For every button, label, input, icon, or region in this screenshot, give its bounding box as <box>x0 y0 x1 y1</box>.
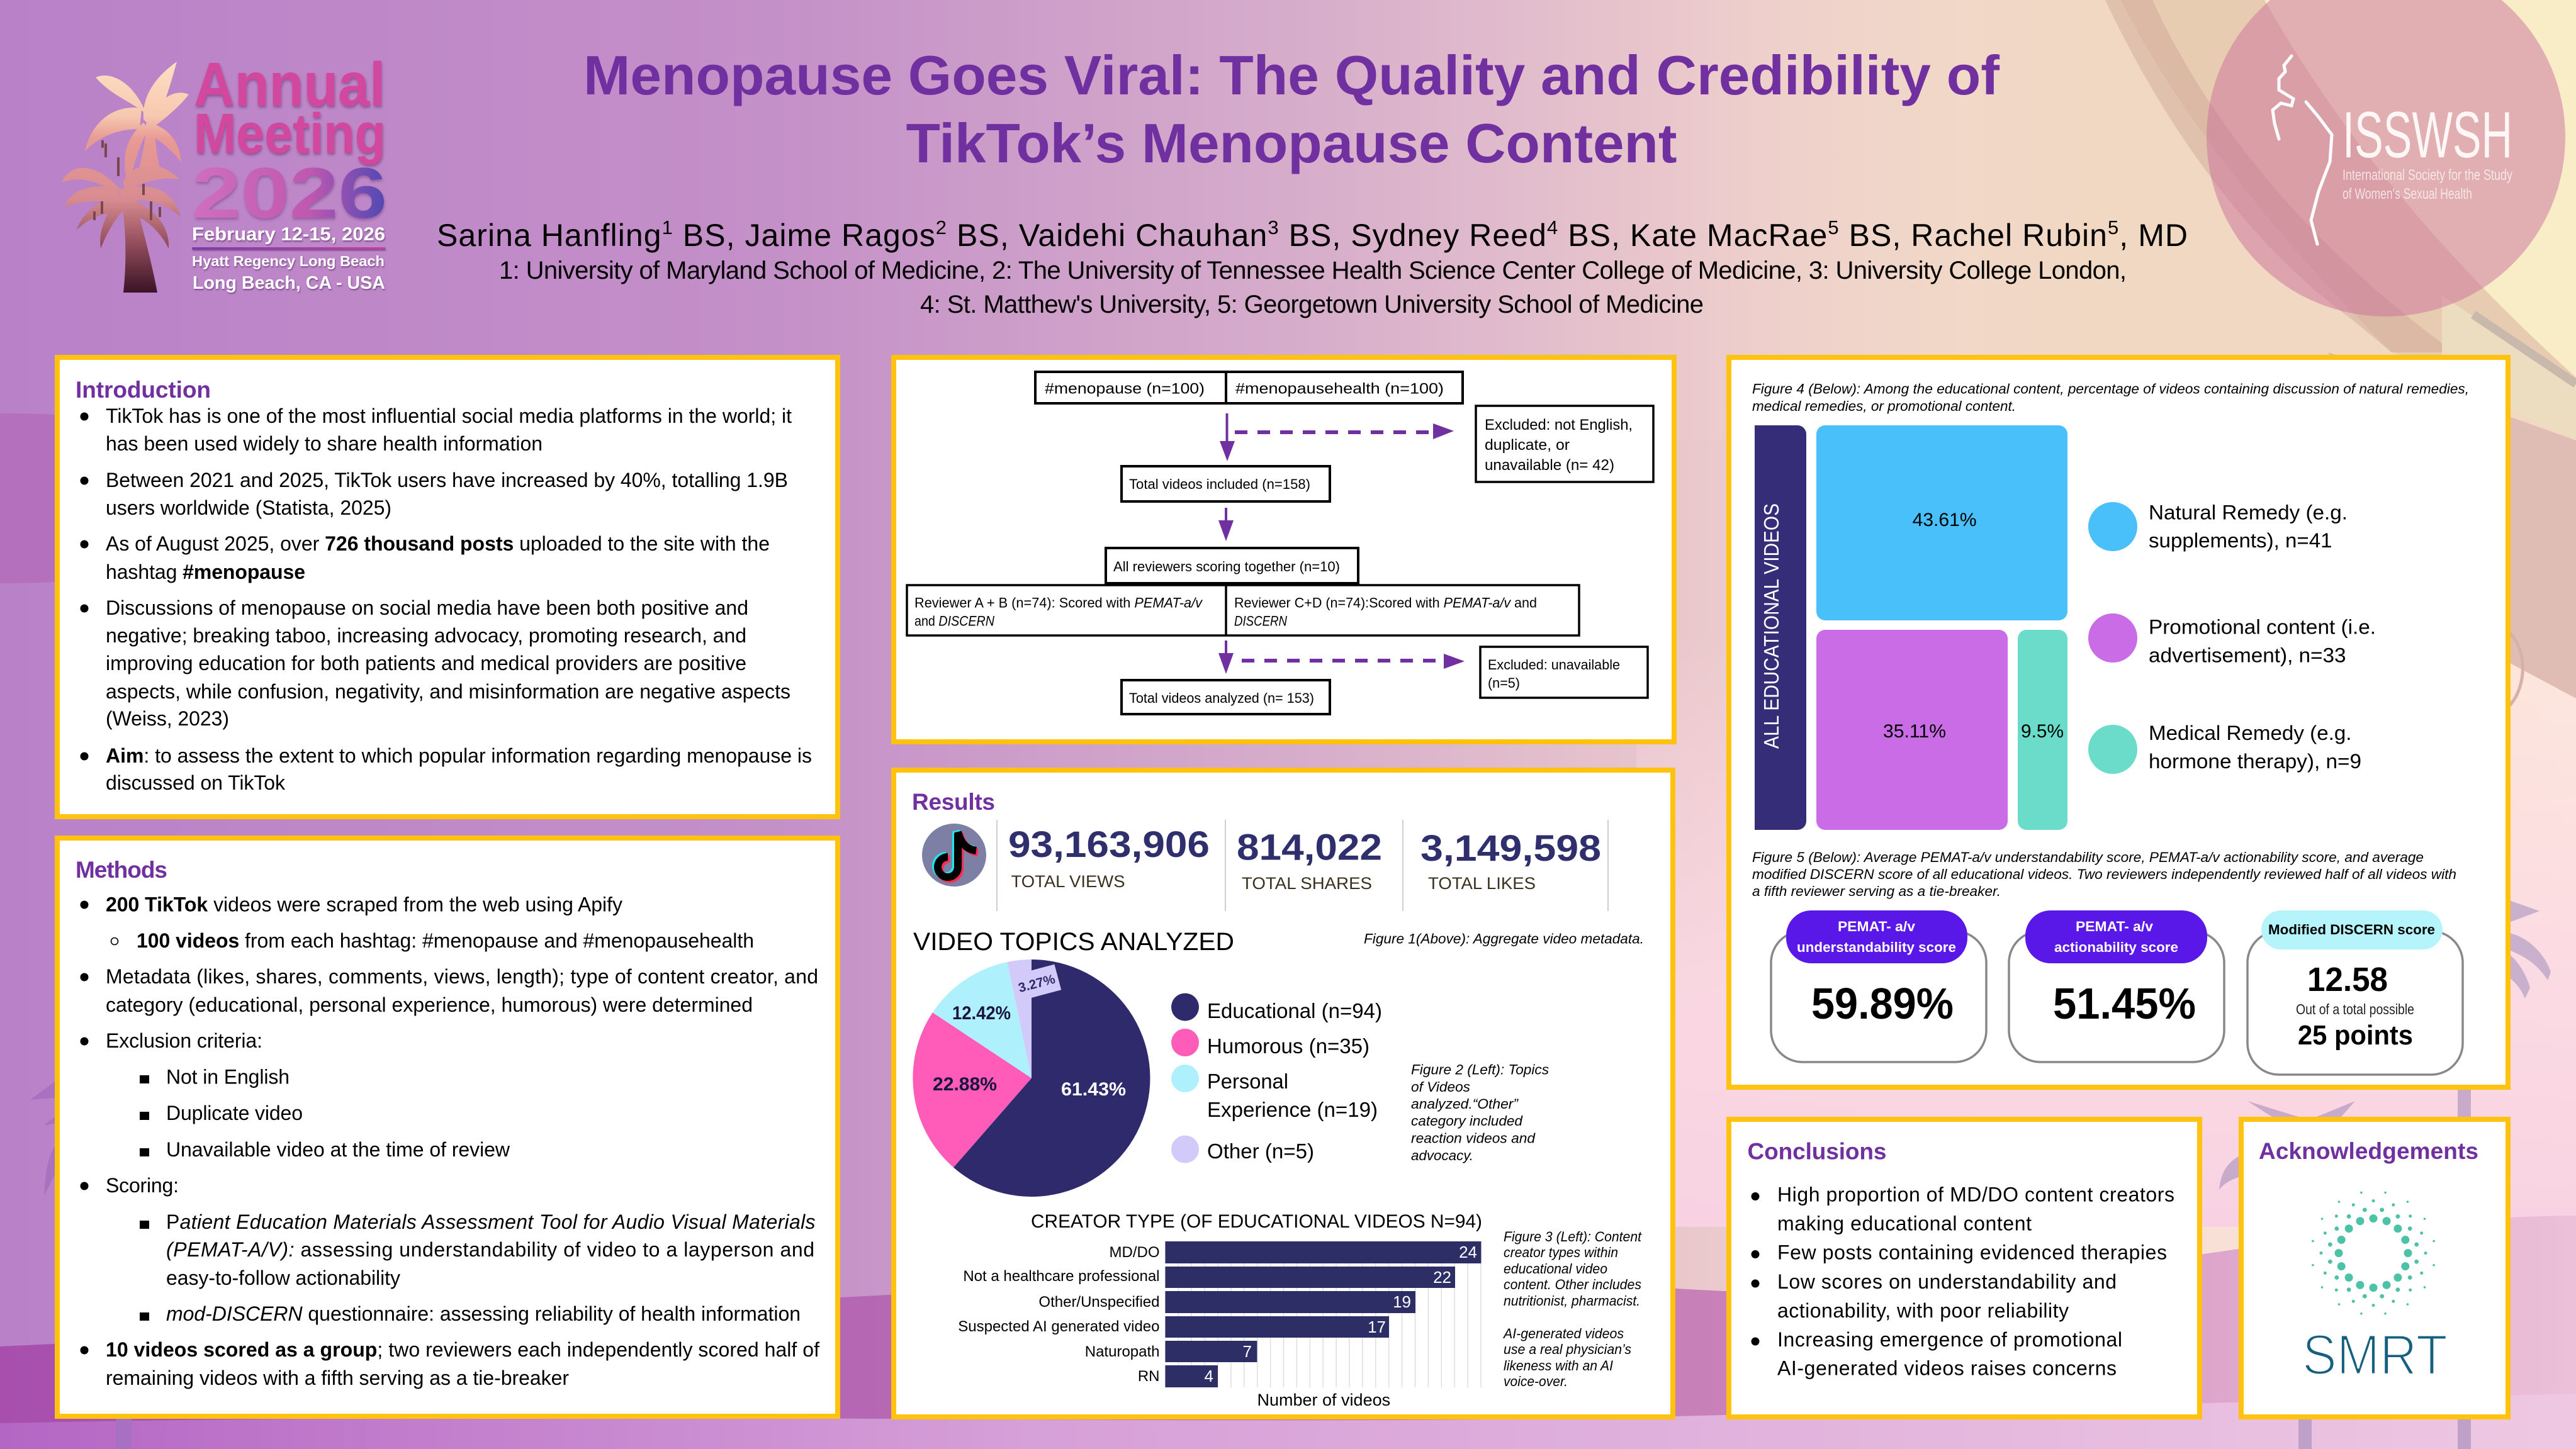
authors: Sarina Hanfling <box>437 218 661 253</box>
authors: 3 <box>1268 216 1279 238</box>
heading: methods: Methods <box>76 857 167 883</box>
authors: 5 <box>2108 216 2118 238</box>
bar chart: creator type: 19 <box>1393 1292 1411 1311</box>
text block: introduction bullets: has been used widely to share health information <box>106 432 543 455</box>
flow box: reviewer pairs <box>907 585 1579 635</box>
caption: figure 3: content. Other includes <box>1504 1277 1641 1292</box>
authors: , MD <box>2119 218 2188 253</box>
caption: figure 3: use a real physician’s <box>1504 1341 1631 1357</box>
text block: methods bullets: 10 videos scored as a group; two reviewers each independently scored half of <box>106 1338 819 1361</box>
panel: acknowledgements <box>2241 1119 2508 1417</box>
flow box: hashtags: #menopausehealth (n=100) <box>1235 380 1444 398</box>
text block: methods bullets: 200 TikTok videos were scraped from the web using Apify <box>106 893 622 916</box>
legend: remedies: hormone therapy), n=9 <box>2149 750 2361 773</box>
text block: introduction bullets: users worldwide (Statista, 2025) <box>106 496 391 519</box>
score card: actionability <box>2009 910 2224 1062</box>
caption: figure 2 <box>1411 1062 1549 1163</box>
logo: SMRT <box>2302 1191 2448 1387</box>
bar chart: creator type: Suspected AI generated video <box>958 1318 1159 1335</box>
pie chart: video topics: 12.42% <box>952 1003 1011 1024</box>
authors: BS, Rachel Rubin <box>1840 218 2107 253</box>
caption: figure 4: medical remedies, or promotional content. <box>1752 398 2016 414</box>
stat: total views: 93,163,906 <box>1008 824 1210 865</box>
panel: figures 4 and 5 <box>1729 357 2508 1087</box>
bar chart: creator type: Other/Unspecified <box>1038 1294 1159 1311</box>
treemap: educational videos: 43.61% <box>1913 510 1977 530</box>
text block: introduction bullets: improving education for both patients and medical providers are positive <box>106 652 746 674</box>
caption: figure 5 <box>1752 849 2456 899</box>
score card: understandability: understandability score <box>1797 939 1956 955</box>
flow box: hashtags <box>1035 372 1463 403</box>
bar chart: creator type: 22 <box>1433 1268 1451 1287</box>
icon: tiktok logo <box>922 824 986 887</box>
bar chart: creator type: 7 <box>1243 1342 1252 1361</box>
caption: figure 5: modified DISCERN score of all educational videos. Two reviewers independently reviewed half of all videos with <box>1752 866 2456 882</box>
caption: figure 4: Figure 4 (Below): Among the educational content, percentage of videos containing discussion of natural remedies, <box>1752 381 2469 396</box>
text block: conclusions bullets: Low scores on understandability and <box>1777 1270 2117 1293</box>
flow box: excluded 5: Excluded: unavailable <box>1488 657 1620 673</box>
arrow: dashed to excluded 5 <box>1242 654 1465 669</box>
caption: figure 2: reaction videos and <box>1411 1130 1536 1146</box>
arrow: down to included <box>1220 413 1235 461</box>
text block: conclusions bullets: making educational content <box>1777 1212 2032 1235</box>
stat: total shares: TOTAL SHARES <box>1242 874 1372 893</box>
caption: figure 1: Figure 1(Above): Aggregate video metadata. <box>1364 931 1644 947</box>
authors: BS, Kate MacRae <box>1558 218 1827 253</box>
legend: video topics: Experience (n=19) <box>1207 1098 1378 1121</box>
text block: introduction bullets: discussed on TikTok <box>106 771 286 794</box>
text block: introduction bullets: TikTok has is one of the most influential social media platforms in the world; it <box>106 405 792 427</box>
logo: SMRT: SMRT <box>2302 1324 2448 1387</box>
caption: figure 3: likeness with an AI <box>1504 1358 1613 1373</box>
text block: methods bullets: Exclusion criteria: <box>106 1029 262 1052</box>
caption: figure 3: educational video <box>1504 1261 1607 1277</box>
logo text: dates and venue: Long Beach, CA - USA <box>193 273 385 293</box>
bar chart: creator type: 17 <box>1368 1318 1386 1336</box>
caption: figure 5: Figure 5 (Below): Average PEMAT-a/v understandability score, PEMAT-a/v actionability score, and average <box>1752 849 2424 865</box>
legend: video topics: Humorous (n=35) <box>1207 1034 1370 1058</box>
text block: introduction bullets: Between 2021 and 2025, TikTok users have increased by 40%, totalling 1.9B <box>106 469 788 491</box>
bar chart: creator type: MD/DO <box>1109 1244 1159 1261</box>
authors: 5 <box>1828 216 1839 238</box>
text block: conclusions bullets: High proportion of MD/DO content creators <box>1777 1183 2174 1206</box>
logo: ISSWSH: of Women's Sexual Health <box>2343 186 2472 203</box>
logo text: dates and venue <box>192 224 385 293</box>
score card: modified discern: Out of a total possible <box>2296 1001 2414 1017</box>
stat: total likes: TOTAL LIKES <box>1428 874 1536 893</box>
stat: total likes <box>1420 828 1601 893</box>
text block: methods bullets: category (educational, personal experience, humorous) were determined <box>106 993 753 1016</box>
logo: ISSWSH: International Society for the Study <box>2343 167 2512 184</box>
text block: introduction bullets: Discussions of menopause on social media have been both positive and <box>106 596 748 619</box>
text block: methods bullets: Metadata (likes, shares, comments, views, length); type of content creator, and <box>106 965 818 988</box>
score card: actionability: PEMAT- a/v <box>2076 919 2154 934</box>
bar chart: creator type: Naturopath <box>1085 1343 1159 1360</box>
flow box: excluded 42 <box>1476 406 1653 482</box>
legend: remedies: advertisement), n=33 <box>2149 644 2346 667</box>
legend: video topics: Personal <box>1207 1070 1288 1093</box>
arrow: down to reviewers <box>1218 508 1234 541</box>
legend: remedies <box>2088 501 2376 774</box>
bar chart: creator type: Number of videos <box>1257 1390 1390 1409</box>
treemap: educational videos: 35.11% <box>1883 721 1946 742</box>
pie chart: video topics: 3.27% <box>1017 972 1057 995</box>
text block: methods bullets: easy-to-follow actionability <box>166 1267 400 1289</box>
flow box: total analyzed: Total videos analyzed (n= 153) <box>1129 690 1314 706</box>
stat: total shares <box>1237 827 1382 893</box>
score card: modified discern: 25 points <box>2298 1020 2413 1051</box>
text block: methods bullets: Duplicate video <box>166 1102 303 1124</box>
flow box: excluded 42: Excluded: not English, <box>1485 417 1633 434</box>
stat: total views: TOTAL VIEWS <box>1011 872 1125 891</box>
chart title: CREATOR TYPE (OF EDUCATIONAL VIDEOS N=94) <box>1031 1211 1482 1232</box>
treemap: educational videos <box>1755 425 2067 830</box>
heading: introduction: Introduction <box>76 377 211 403</box>
score card: actionability: 51.45% <box>2053 979 2196 1028</box>
flow box: total included: Total videos included (n=158) <box>1129 476 1310 492</box>
flow box: reviewer pairs: DISCERN <box>1234 613 1287 629</box>
caption: figure 2: advocacy. <box>1411 1148 1473 1163</box>
bar chart: creator type: 4 <box>1205 1367 1213 1385</box>
logo text: 2026: 2026 <box>192 154 387 233</box>
text block: introduction bullets: negative; breaking taboo, increasing advocacy, promoting research, and <box>106 624 746 647</box>
flow box: excluded 5 <box>1480 647 1648 698</box>
text block: methods bullets: Unavailable video at the time of review <box>166 1138 510 1161</box>
logo: annual meeting 2026 <box>62 50 387 293</box>
caption: figure 3: nutritionist, pharmacist. <box>1504 1293 1640 1309</box>
caption: figure 3: Figure 3 (Left): Content <box>1504 1229 1642 1245</box>
treemap: educational videos: ALL EDUCATIONAL VIDEOS <box>1760 503 1783 749</box>
bar chart: creator type <box>958 1211 1482 1409</box>
caption: figure 2: of Videos <box>1411 1079 1470 1095</box>
title: Menopause Goes Viral: The Quality and Credibility of <box>583 44 2000 106</box>
caption: figure 3: creator types within <box>1504 1245 1618 1260</box>
bar chart: creator type: Not a healthcare professional <box>963 1268 1159 1285</box>
text block: methods bullets: Patient Education Materials Assessment Tool for Audio Visual Materials <box>166 1211 816 1233</box>
authors: BS, Vaidehi Chauhan <box>947 218 1267 253</box>
text block: conclusions bullets: Increasing emergence of promotional <box>1777 1328 2122 1351</box>
flow box: total included <box>1122 466 1330 501</box>
caption: figure 2: category included <box>1411 1113 1523 1129</box>
text block: introduction bullets: (Weiss, 2023) <box>106 707 229 730</box>
caption: figure 5: a fifth reviewer serving as a tie-breaker. <box>1752 883 2001 899</box>
heading: acknowledgements: Acknowledgements <box>2259 1138 2478 1164</box>
flow box: excluded 5: (n=5) <box>1488 675 1520 691</box>
affiliations: 1: University of Maryland School of Medicine, 2: The University of Tennessee Health Science Center College of Medicine, 3: University College London, <box>499 257 2127 284</box>
panel: conclusions <box>1729 1119 2200 1417</box>
text block: introduction bullets: Aim: to assess the extent to which popular information regarding menopause is <box>106 744 812 767</box>
text block: methods bullets: Scoring: <box>106 1174 179 1197</box>
icon: palm trees <box>62 62 189 293</box>
logo text: dates and venue: Hyatt Regency Long Beach <box>192 253 385 269</box>
logo text: dates and venue: February 12-15, 2026 <box>192 224 385 245</box>
score card: modified discern: 12.58 <box>2307 961 2388 999</box>
arrow: down to analyzed <box>1218 641 1234 674</box>
caption: figure 2: Figure 2 (Left): Topics <box>1411 1062 1549 1077</box>
logo text: Annual: Annual <box>194 50 385 119</box>
flow box: all reviewers: All reviewers scoring together (n=10) <box>1113 559 1340 574</box>
logo text: Meeting: Meeting <box>194 103 386 165</box>
legend: remedies: Medical Remedy (e.g. <box>2149 722 2351 744</box>
text block: introduction bullets: hashtag #menopause <box>106 561 305 583</box>
heading: conclusions: Conclusions <box>1747 1138 1887 1164</box>
legend: video topics: Other (n=5) <box>1207 1139 1314 1163</box>
text block: methods bullets: remaining videos with a fifth serving as a tie-breaker <box>106 1367 569 1389</box>
authors: 1 <box>662 216 673 238</box>
treemap: educational videos: 9.5% <box>2021 721 2064 742</box>
legend: remedies: Natural Remedy (e.g. <box>2149 501 2348 523</box>
text block: methods bullets: 100 videos from each hashtag: #menopause and #menopausehealth <box>137 929 754 952</box>
score card: actionability: actionability score <box>2054 939 2178 955</box>
authors: BS, Jaime Ragos <box>673 218 935 253</box>
text block: conclusions bullets: AI-generated videos raises concerns <box>1777 1357 2117 1380</box>
title <box>583 44 2000 174</box>
flow box: excluded 42: duplicate, or <box>1485 437 1570 454</box>
flow box: reviewer pairs: Reviewer C+D (n=74):Scored with PEMAT-a/v and <box>1234 595 1537 610</box>
legend: video topics <box>1171 993 1382 1163</box>
stat: total shares: 814,022 <box>1237 827 1382 868</box>
stat: total views <box>1008 824 1210 891</box>
text block: conclusions bullets: actionability, with poor reliability <box>1777 1299 2069 1322</box>
authors: 4 <box>1547 216 1558 238</box>
panel: methods <box>57 838 838 1416</box>
text block: methods bullets: Not in English <box>166 1066 290 1088</box>
text block: introduction bullets <box>81 405 812 794</box>
flow box: total analyzed <box>1122 680 1330 714</box>
heading: results: Results <box>912 789 995 815</box>
caption: figure 3 <box>1502 1229 1642 1389</box>
caption: figure 3: AI-generated videos <box>1502 1326 1624 1341</box>
affiliations <box>499 257 2127 318</box>
flow box: all reviewers <box>1106 548 1358 583</box>
panel: introduction <box>57 357 838 817</box>
title: TikTok’s Menopause Content <box>906 112 1677 174</box>
score card: modified discern <box>2247 910 2463 1075</box>
logo: ISSWSH <box>2207 0 2565 316</box>
flow box: reviewer pairs: and DISCERN <box>914 613 994 629</box>
score card: understandability: 59.89% <box>1811 979 1954 1028</box>
text block: conclusions bullets <box>1751 1183 2174 1380</box>
caption: figure 4 <box>1752 381 2469 414</box>
bar chart: creator type: 24 <box>1459 1243 1477 1262</box>
legend: video topics: Educational (n=94) <box>1207 999 1382 1022</box>
affiliations: 4: St. Matthew's University, 5: Georgetown University School of Medicine <box>920 291 1704 318</box>
text block: conclusions bullets: Few posts containing evidenced therapies <box>1777 1241 2167 1263</box>
text block: methods bullets <box>81 893 819 1389</box>
stat: total likes: 3,149,598 <box>1420 828 1601 869</box>
caption: figure 2: analyzed.“Other” <box>1411 1096 1519 1112</box>
heading: video topics: VIDEO TOPICS ANALYZED <box>913 928 1234 956</box>
caption: figure 3: voice-over. <box>1504 1373 1568 1389</box>
pie chart: video topics: 22.88% <box>933 1074 997 1095</box>
authors: 2 <box>936 216 947 238</box>
text block: methods bullets: (PEMAT-A/V): assessing understandability of video to a layperson and <box>166 1238 814 1261</box>
text block: methods bullets: mod-DISCERN questionnaire: assessing reliability of health information <box>166 1302 801 1325</box>
pie chart: video topics <box>913 959 1150 1197</box>
arrow: dashed to excluded <box>1235 423 1454 439</box>
text block: introduction bullets: As of August 2025, over 726 thousand posts uploaded to the site with the <box>106 532 770 555</box>
legend: remedies: supplements), n=41 <box>2149 529 2332 552</box>
text block: introduction bullets: aspects, while confusion, negativity, and misinformation are negative aspects <box>106 680 790 703</box>
legend: remedies: Promotional content (i.e. <box>2149 616 2376 639</box>
flow box: excluded 42: unavailable (n= 42) <box>1485 457 1614 474</box>
score card: modified discern: Modified DISCERN score <box>2268 922 2435 937</box>
flow box: hashtags: #menopause (n=100) <box>1045 380 1205 398</box>
score card: understandability <box>1771 910 1986 1062</box>
flow box: reviewer pairs: Reviewer A + B (n=74): Scored with PEMAT-a/v <box>914 595 1203 610</box>
panel: results <box>894 770 1673 1417</box>
authors: BS, Sydney Reed <box>1280 218 1546 253</box>
pie chart: video topics: 61.43% <box>1061 1079 1126 1100</box>
bar chart: creator type: RN <box>1138 1368 1159 1385</box>
panel: study flow diagram <box>894 357 1674 742</box>
score card: understandability: PEMAT- a/v <box>1838 919 1916 934</box>
